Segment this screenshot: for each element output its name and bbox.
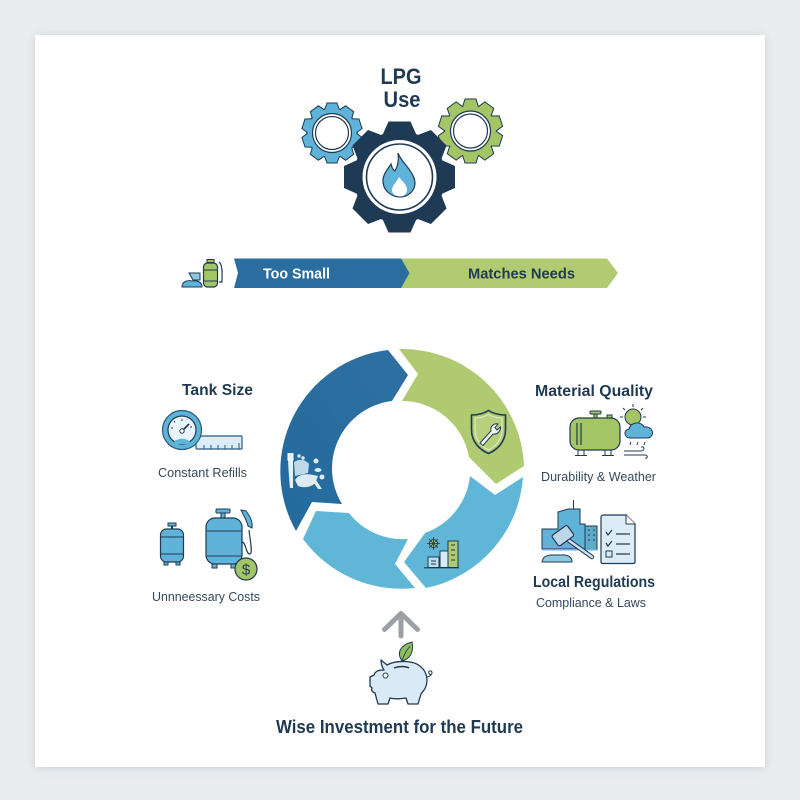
bar segment: too small bbox=[234, 258, 410, 288]
icon: green gear bbox=[438, 99, 503, 163]
label: matches needs: Matches Needs bbox=[468, 266, 575, 282]
text: constant refills: Constant Refills bbox=[158, 466, 247, 480]
segment: light blue bottom bbox=[303, 511, 415, 589]
text: unnecessary costs: Unnneessary Costs bbox=[152, 590, 260, 604]
icon: shield with wrench bbox=[472, 410, 506, 454]
icon: green tank with weather bbox=[570, 404, 653, 458]
label: too small: Too Small bbox=[263, 266, 330, 282]
icon: gauge with ruler bbox=[162, 410, 242, 450]
segment: green bbox=[399, 349, 524, 484]
arrow bar: too small to matches needs bbox=[234, 258, 618, 288]
title: Use bbox=[384, 87, 420, 112]
icon: hand with water drops bbox=[288, 453, 324, 489]
arrow: up bbox=[384, 614, 418, 636]
icon: blue gear bbox=[301, 103, 363, 163]
icon: piggy bank with leaf bbox=[370, 642, 432, 704]
label: tank size: Tank Size bbox=[182, 382, 253, 399]
chart: circular cycle ring bbox=[280, 349, 524, 589]
icon: city with gavel bbox=[542, 500, 597, 562]
text: wise investment for the future: Wise Investment for the Future bbox=[276, 717, 523, 737]
icon: small tank and burner bbox=[182, 260, 222, 287]
title: LPG bbox=[380, 64, 422, 89]
segment: dark blue bbox=[280, 350, 408, 531]
icon: central navy gear with flame bbox=[344, 122, 455, 232]
icon: small tank bbox=[160, 523, 184, 565]
icon: large tank with nozzle and dollar bbox=[206, 509, 257, 580]
icon: buildings with sun bbox=[424, 537, 459, 568]
text: durability and weather: Durability & Weather bbox=[541, 470, 656, 484]
title bbox=[380, 64, 422, 112]
segment: light blue right bbox=[404, 476, 523, 588]
label: local regulations: Local Regulations bbox=[533, 574, 655, 591]
icon: checklist document bbox=[601, 515, 635, 564]
icon: large tank with nozzle and dollar: $ bbox=[242, 562, 251, 578]
label: material quality: Material Quality bbox=[535, 383, 653, 400]
bar segment: matches needs bbox=[400, 258, 618, 288]
text: compliance and laws: Compliance & Laws bbox=[536, 596, 646, 610]
